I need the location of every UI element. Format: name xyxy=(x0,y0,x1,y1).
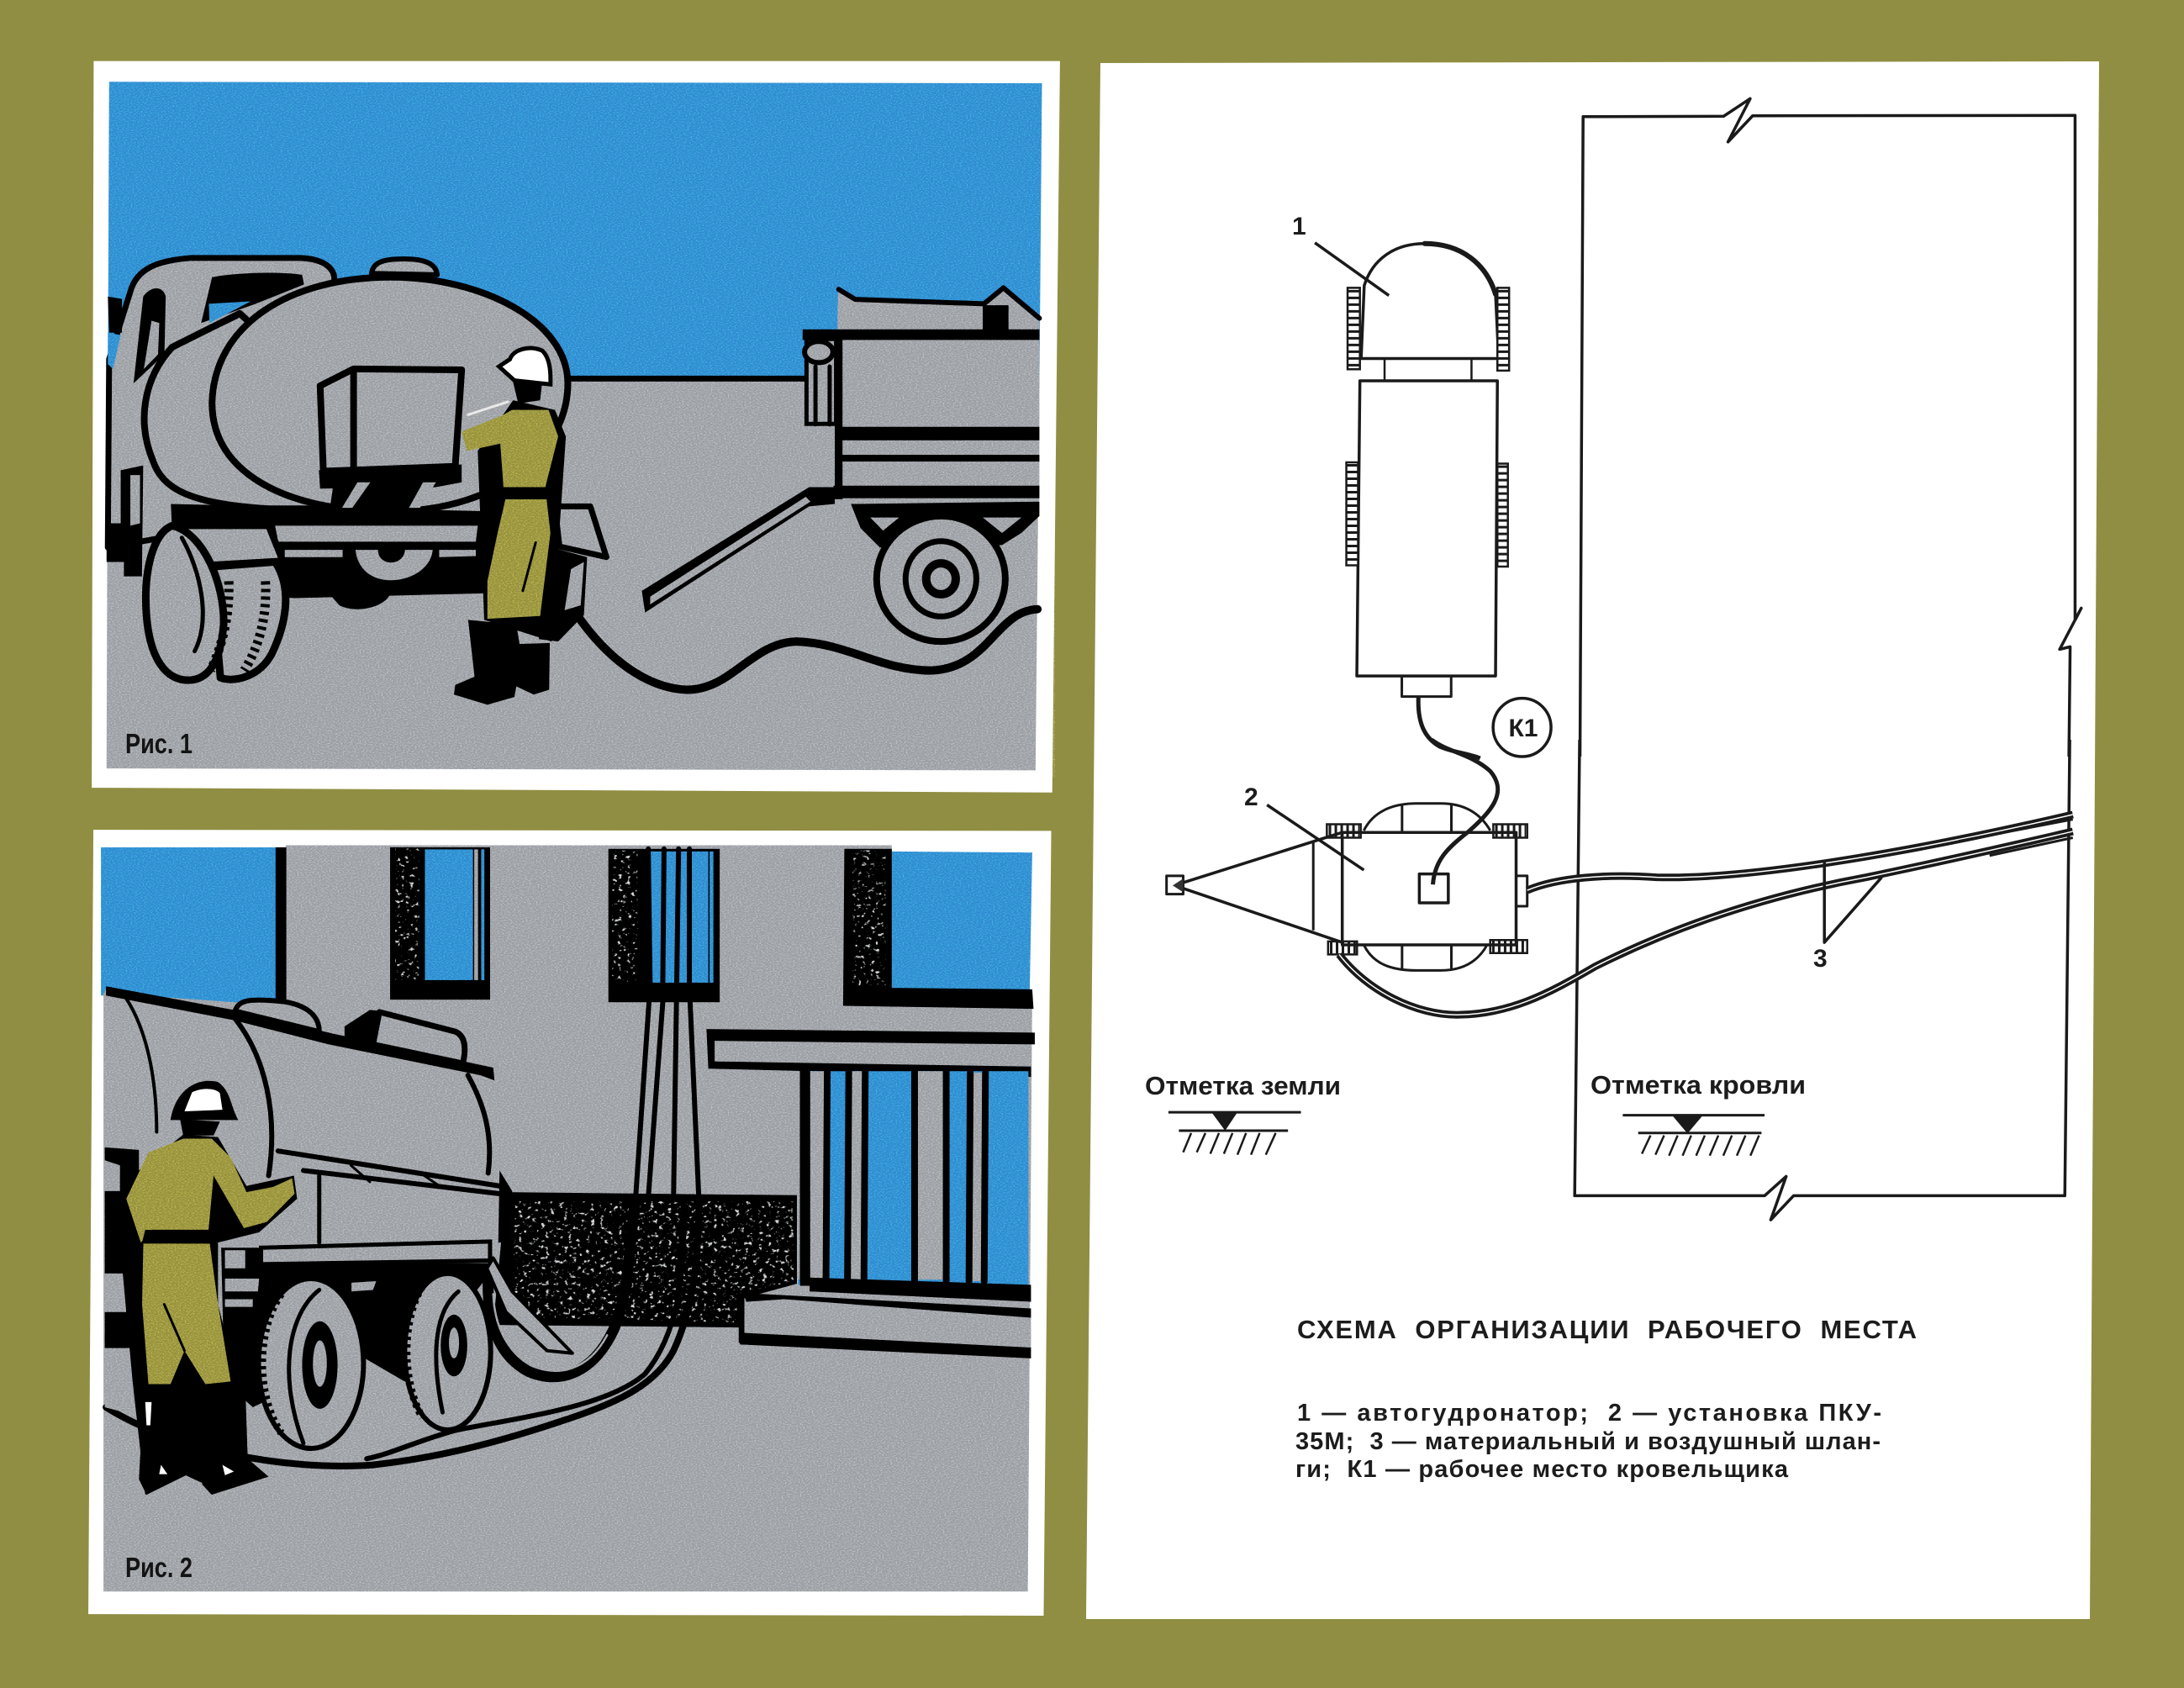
hoses descending from window xyxy=(636,985,699,1199)
window 3 xyxy=(843,849,1033,1009)
tanker figure 2 xyxy=(105,986,572,1448)
legend text: 1 — автогудронатор; 2 — установка ПКУ- xyxy=(1297,1400,1881,1427)
entrance glazing and columns xyxy=(798,1069,1028,1286)
white diagram sheet xyxy=(1086,61,2099,1619)
material and air hoses xyxy=(1339,815,2073,1015)
sky right xyxy=(892,852,1032,990)
tank body xyxy=(145,259,567,511)
dark speckled plinth xyxy=(493,1192,797,1327)
white card 1 xyxy=(92,61,1060,793)
sky xyxy=(108,82,1042,388)
label K1: К1 xyxy=(1508,715,1538,742)
installation trailer xyxy=(803,287,1039,547)
hose to K1 upper xyxy=(1418,697,1480,758)
horizon line xyxy=(565,376,806,382)
panel: workplace scheme xyxy=(1086,61,2099,1619)
window 1 xyxy=(390,847,490,1000)
label: ground level: Отметка земли xyxy=(1145,1071,1341,1100)
truck wheels figure 2 xyxy=(259,1274,491,1448)
leader 2 xyxy=(1267,804,1364,870)
K1 circle xyxy=(1493,699,1551,757)
sky left xyxy=(101,847,284,1006)
label: figure 2: Рис. 2 xyxy=(125,1552,193,1583)
tanker plan xyxy=(1347,244,1509,697)
panel: figure 1 tanker and trailer xyxy=(92,61,1060,793)
scheme title: СХЕМА ОРГАНИЗАЦИИ РАБОЧЕГО МЕСТА xyxy=(1297,1315,1917,1344)
label: figure 1: Рис. 1 xyxy=(125,728,193,759)
label: roof level: Отметка кровли xyxy=(1591,1070,1806,1100)
panel: figure 2 building and tanker xyxy=(88,830,1052,1616)
hoses on facade and plinth xyxy=(106,1199,699,1466)
white card 2 xyxy=(88,830,1052,1616)
truck rear wheels xyxy=(145,525,286,680)
roof level mark xyxy=(1622,1116,1765,1156)
legend text: 35М; 3 — материальный и воздушный шлан- xyxy=(1295,1428,1881,1455)
tanker wheels xyxy=(1347,287,1509,567)
hose to K1 lower xyxy=(1432,740,1498,884)
leader 1 xyxy=(1315,243,1389,296)
trailer wheel xyxy=(877,516,1005,641)
building outline lower xyxy=(1575,740,2070,1220)
window 2 with hoses xyxy=(609,849,720,1002)
label 3: 3 xyxy=(1813,945,1828,973)
chassis and bumper xyxy=(171,504,606,641)
hose 1 xyxy=(578,609,1037,690)
legend text: ги; К1 — рабочее место кровельщика xyxy=(1295,1456,1789,1483)
legend text xyxy=(1295,1400,1881,1483)
ramp xyxy=(641,487,835,613)
worker figure 2 xyxy=(108,1081,297,1495)
worker figure 1 xyxy=(454,348,566,704)
installation unit plan xyxy=(1167,804,1527,970)
label 2: 2 xyxy=(1244,783,1258,811)
truck cab xyxy=(107,258,335,577)
building outline upper xyxy=(1580,98,2081,757)
leader 3 xyxy=(1824,861,1881,942)
control box on tank xyxy=(319,369,462,509)
canopy xyxy=(706,1029,1035,1077)
building wall and ground xyxy=(103,846,1032,1591)
steps xyxy=(739,1278,1031,1358)
label 1: 1 xyxy=(1292,213,1306,240)
ground xyxy=(107,378,1039,770)
nozzle xyxy=(1167,832,1343,942)
paper grain on illustrations xyxy=(101,80,1055,1593)
ground level mark xyxy=(1168,1112,1301,1155)
